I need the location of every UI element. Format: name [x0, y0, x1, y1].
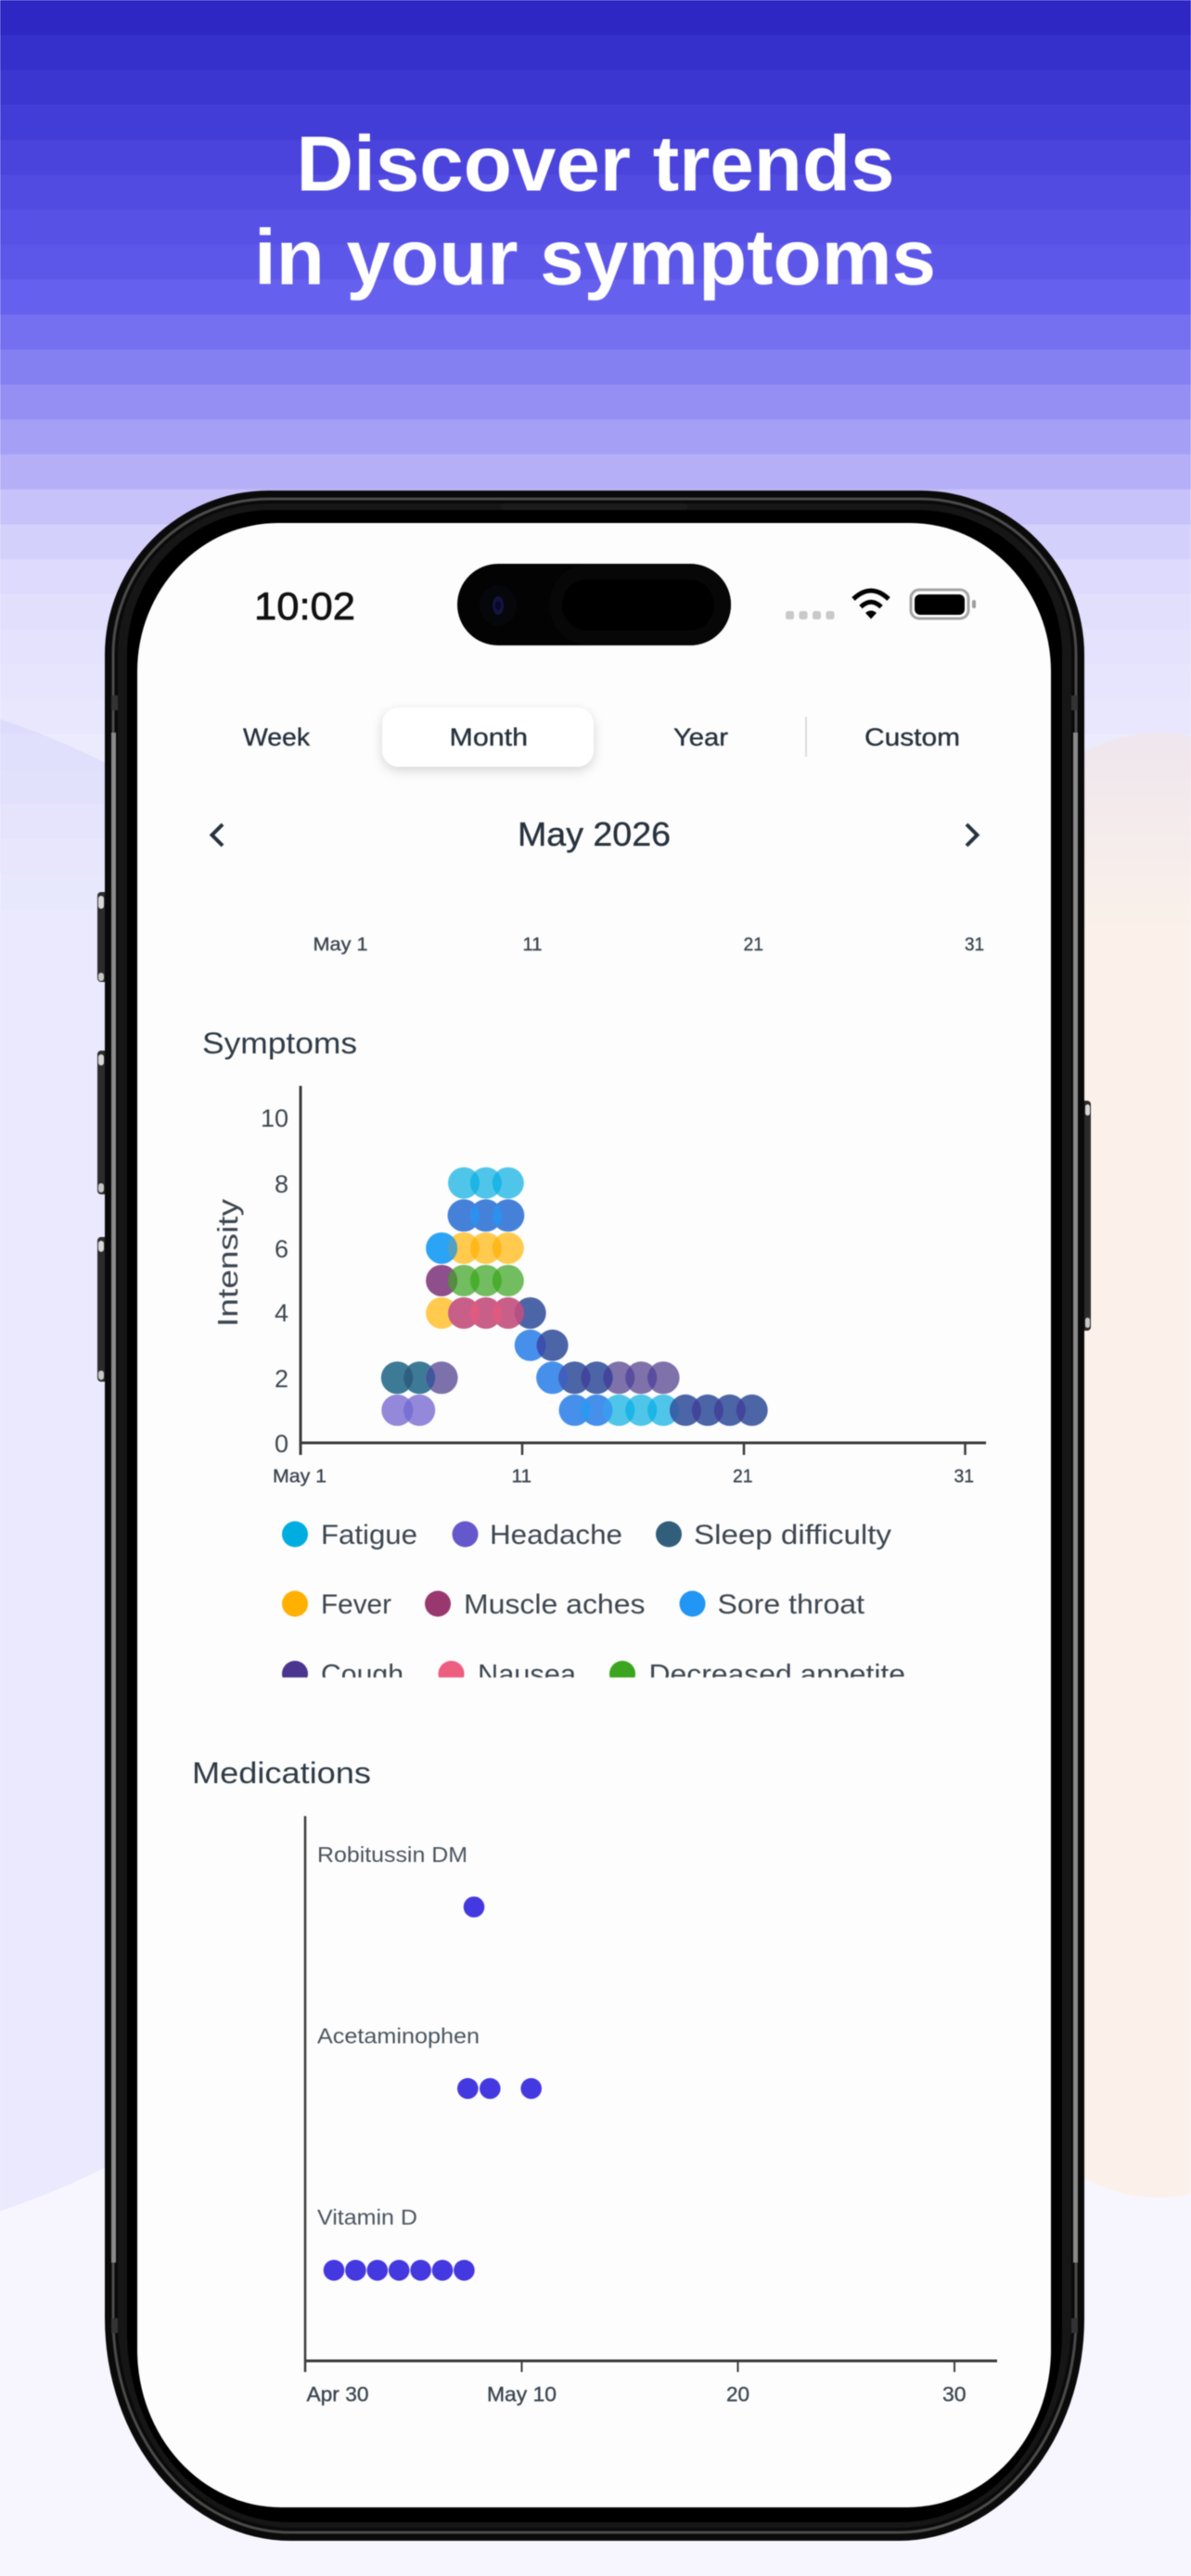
y axis labels: 4 — [275, 1299, 288, 1327]
legend row 2: Fever — [321, 1589, 391, 1620]
tab labels: Year — [673, 723, 728, 751]
symptom dots — [381, 1167, 768, 1426]
icon: next chevron — [967, 824, 978, 846]
icon: previous chevron — [211, 824, 223, 846]
dynamic island — [457, 564, 731, 645]
medication: Robitussin DM: Robitussin DM — [317, 1843, 467, 1867]
x axis labels: May 10 — [487, 2383, 557, 2405]
medication: Acetaminophen: Acetaminophen — [317, 2023, 480, 2047]
title — [254, 121, 936, 300]
x axis labels — [273, 1467, 974, 1487]
medication: Acetaminophen — [317, 2023, 542, 2099]
period tabs — [243, 708, 960, 767]
tab labels: Week — [243, 723, 311, 751]
top date axis labels: May 1 — [314, 935, 367, 955]
legend row 2 — [282, 1589, 865, 1620]
icon: battery — [911, 590, 976, 618]
tab labels — [243, 723, 960, 751]
phone body — [105, 491, 1084, 2541]
x axis labels: 11 — [512, 1467, 531, 1487]
medication: Robitussin DM — [317, 1843, 484, 1918]
legend row 3 (clipped) — [281, 1660, 905, 1678]
symptoms chart — [211, 1086, 986, 1487]
title: in your symptoms — [254, 213, 936, 300]
decorative peach blob right — [834, 733, 1191, 2198]
legend row 1 — [282, 1520, 891, 1550]
y axis labels — [261, 1104, 288, 1458]
y axis labels: 0 — [275, 1430, 288, 1458]
legend row 1: Fatigue — [321, 1520, 417, 1550]
axes — [300, 1086, 986, 1455]
axes — [304, 1816, 997, 2372]
status bar time: 10:02 — [254, 584, 355, 628]
medication: Vitamin D: Vitamin D — [317, 2205, 417, 2229]
selected tab pill — [382, 708, 594, 767]
x axis labels: 20 — [726, 2383, 749, 2405]
month navigator — [211, 815, 978, 853]
icon: wifi — [853, 591, 889, 619]
x axis labels: 31 — [954, 1467, 974, 1487]
tab labels: Custom — [864, 723, 960, 751]
heading: symptoms: Symptoms — [202, 1027, 357, 1060]
medication: Vitamin D — [317, 2205, 475, 2281]
title: Discover trends — [297, 121, 895, 208]
top date axis labels: 21 — [744, 935, 763, 955]
y axis labels: 10 — [261, 1104, 288, 1132]
decorative lavender blob left — [0, 679, 538, 2251]
y axis labels: 2 — [275, 1365, 288, 1393]
y axis labels: 6 — [275, 1235, 288, 1263]
legend row 3 (clipped): Nausea — [478, 1660, 576, 1690]
medications chart — [304, 1816, 997, 2405]
top date axis labels — [314, 935, 984, 955]
x axis labels — [306, 2383, 967, 2405]
symptom legend — [282, 1520, 905, 1690]
legend row 3 (clipped): Decreased appetite — [649, 1660, 905, 1690]
legend row 1: Sleep difficulty — [694, 1520, 891, 1550]
tab labels: Month — [449, 723, 528, 751]
top date axis labels: 31 — [965, 935, 984, 955]
x axis labels: May 1 — [273, 1467, 327, 1487]
phone screen — [137, 523, 1051, 2507]
legend row 2: Sore throat — [718, 1589, 865, 1620]
legend row 1: Headache — [490, 1520, 622, 1550]
status signal dots — [786, 611, 835, 619]
top date axis labels: 11 — [523, 935, 542, 955]
y axis labels: 8 — [275, 1170, 288, 1198]
legend row 2: Muscle aches — [464, 1589, 646, 1620]
legend row 3 (clipped): Cough — [321, 1660, 403, 1690]
heading: medications: Medications — [192, 1756, 371, 1790]
x axis labels: 30 — [942, 2383, 967, 2405]
month label: May 2026 — [518, 815, 671, 853]
phone side buttons — [97, 892, 1091, 1382]
x axis labels: Apr 30 — [306, 2383, 369, 2405]
x axis labels: 21 — [733, 1467, 753, 1487]
y axis title: Intensity — [211, 1198, 244, 1327]
